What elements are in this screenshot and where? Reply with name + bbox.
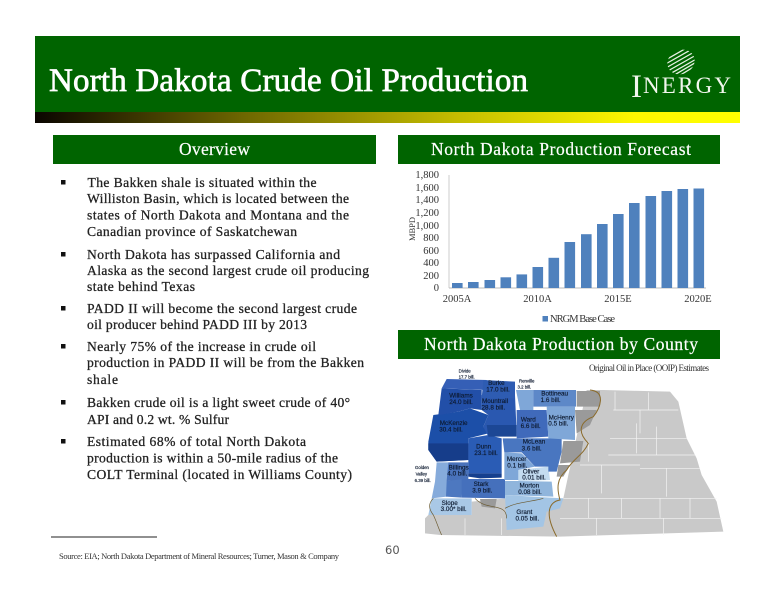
county labels: 30.4 bill.: [439, 426, 463, 433]
county labels: Golden: [415, 465, 430, 470]
y axis title: MBPD: [407, 217, 417, 241]
overview bullet list: state behind Texas: [87, 279, 195, 294]
county labels: Dunn: [476, 443, 492, 450]
county labels: Billings: [449, 464, 469, 471]
overview bullet list: Alaska as the second largest crude oil producing: [87, 263, 369, 278]
y axis labels: 400: [423, 258, 439, 269]
overview bullet list: production in PADD II will be from the Bakken: [87, 355, 364, 370]
county labels: 0.5 bill.: [548, 420, 569, 427]
county labels: 28.8 bill.: [482, 404, 505, 411]
county labels: 0.05 bill.: [516, 515, 539, 522]
county labels: Grant: [516, 509, 532, 516]
panel heading: overview: Overview: [179, 139, 250, 159]
darker grey counties: [480, 391, 600, 508]
county labels: Bottineau: [541, 390, 569, 397]
footnote rule: [51, 536, 157, 538]
overview bullet list: COLT Terminal (located in Williams County): [87, 467, 352, 483]
x axis labels: 2020E: [684, 294, 712, 305]
county labels: Morton: [519, 483, 540, 490]
county labels: Slope: [442, 500, 458, 507]
county labels: Divide: [459, 368, 471, 373]
legend: NRGM Base Case: [550, 314, 615, 325]
county labels: 3.2 bill.: [517, 385, 531, 390]
x axis labels: 2010A: [523, 294, 552, 305]
county labels: 17.7 bill.: [459, 374, 475, 379]
grey state: [425, 390, 723, 537]
y axis labels: 1,000: [415, 221, 439, 232]
logo: Inergy: NERGY: [643, 73, 731, 98]
county labels: 3.6 bill.: [522, 446, 542, 453]
y axis labels: 1,800: [415, 170, 439, 181]
bars: [452, 188, 704, 288]
county labels: 6.6 bill.: [521, 423, 541, 430]
overview bullet list: Estimated 68% of total North Dakota: [87, 434, 306, 449]
county map: [415, 368, 723, 537]
overview bullet list: Williston Basin, which is located between the: [87, 191, 349, 206]
county labels: Burke: [488, 380, 505, 387]
county labels: Valley: [416, 472, 428, 477]
county labels: Williams: [449, 392, 473, 399]
y axis labels: 200: [423, 271, 439, 282]
county labels: Renville: [519, 379, 535, 384]
overview bullet list: Nearly 75% of the increase in crude oil: [87, 339, 316, 354]
y axis labels: 1,600: [415, 183, 439, 194]
county labels: 0.01 bill.: [522, 475, 546, 482]
county labels: Stark: [474, 481, 489, 488]
blue counties: [432, 462, 448, 498]
y axis labels: 800: [423, 233, 439, 244]
overview bullet list: oil producer behind PADD III by 2013: [87, 317, 307, 332]
county labels: Oliver: [523, 468, 539, 475]
county labels: Mountrail: [482, 398, 508, 405]
panel heading: forecast: North Dakota Production Forecast: [431, 139, 691, 159]
title: North Dakota Crude Oil Production: [49, 63, 528, 99]
y axis labels: 0: [434, 283, 439, 294]
logo: Inergy: [632, 50, 730, 97]
x axis labels: 2015E: [604, 294, 632, 305]
overview bullet list: Canadian province of Saskatchewan: [87, 224, 297, 239]
overview bullet list: API and 0.2 wt. % Sulfur: [87, 412, 229, 427]
x axis labels: 2005A: [443, 294, 472, 305]
county labels: 0.1 bill.: [507, 462, 528, 469]
county labels: 6.39 bill.: [415, 478, 431, 483]
y axis labels: [415, 170, 439, 294]
overview bullet list: The Bakken shale is situated within the: [88, 175, 316, 190]
county labels: 4.0 bill.: [447, 471, 468, 478]
county labels: 1.6 bill.: [541, 397, 561, 404]
y axis labels: 600: [423, 246, 439, 257]
panel heading: county: North Dakota Production by County: [424, 334, 698, 354]
gradient bar: [35, 112, 740, 123]
county labels: 24.0 bill.: [449, 399, 473, 406]
county labels: 3.9 bill.: [472, 488, 493, 495]
county labels: Ward: [521, 416, 536, 423]
y axis labels: 1,400: [415, 195, 439, 206]
county labels: 0.08 bill.: [518, 489, 542, 496]
county labels: McLean: [523, 439, 546, 446]
header banner: [35, 36, 740, 123]
overview bullet list: states of North Dakota and Montana and the: [87, 208, 349, 222]
rivers: [549, 390, 600, 537]
panel heading: county: [398, 330, 720, 359]
x axis labels: [443, 294, 712, 305]
county labels: 23.1 bill.: [474, 450, 498, 457]
county labels: 17.0 bill.: [486, 386, 510, 393]
overview bullet list: North Dakota has surpassed California and: [87, 247, 340, 262]
source note: Source: EIA; North Dakota Department of Mineral Resources; Turner, Mason & Company: [59, 551, 340, 561]
y axis labels: 1,200: [415, 208, 439, 219]
overview bullet list: shale: [87, 372, 118, 387]
county labels: McHenry: [549, 414, 575, 421]
county labels: Mercer: [507, 456, 527, 463]
county labels: [415, 368, 575, 522]
county labels: 3.00* bill.: [441, 506, 467, 513]
county labels: McKenzie: [440, 420, 468, 427]
overview bullet list: [61, 175, 369, 483]
overview bullet list: PADD II will become the second largest crude: [87, 301, 357, 316]
overview bullet list: production is within a 50-mile radius of the: [87, 450, 338, 466]
logo: Inergy: I: [631, 69, 642, 105]
map legend note: Original Oil in Place (OOIP) Estimates: [589, 363, 709, 373]
panel heading: forecast: [398, 135, 720, 164]
page number: 60: [385, 543, 400, 557]
overview bullet list: Bakken crude oil is a light sweet crude of 40°: [87, 395, 350, 410]
bar chart: production forecast: [407, 170, 712, 325]
panel heading: overview: [53, 135, 376, 164]
